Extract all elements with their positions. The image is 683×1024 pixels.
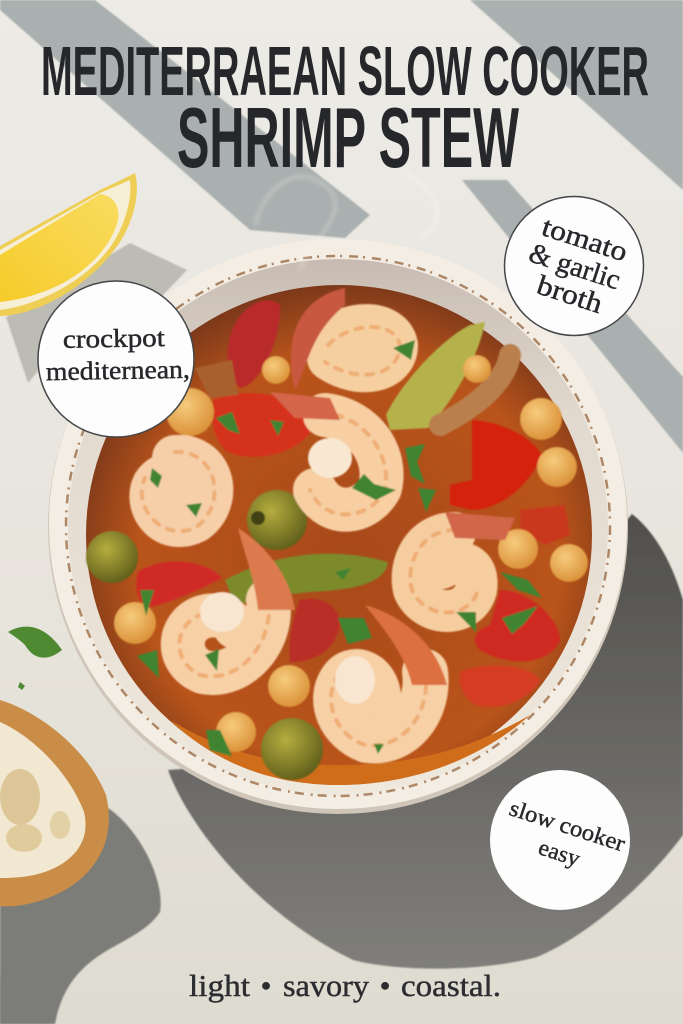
shadow: lemon bbox=[6, 243, 187, 383]
bell peppers and tomatoes bbox=[136, 300, 570, 707]
badge: crockpot mediterranean: crockpot bbox=[63, 323, 166, 354]
lemon wedge bbox=[0, 173, 137, 316]
tagline bbox=[189, 968, 501, 1003]
parsley garnish on counter bbox=[8, 627, 62, 690]
badge: slow cooker easy: easy bbox=[535, 834, 584, 871]
tagline: coastal. bbox=[401, 968, 501, 1003]
bowl bbox=[48, 239, 628, 814]
badge: slow cooker easy: slow cooker bbox=[506, 795, 629, 856]
onion strands bbox=[440, 355, 510, 425]
badge: tomato and garlic broth: & garlic bbox=[525, 238, 624, 296]
tagline: • bbox=[380, 968, 390, 1003]
tagline: light bbox=[189, 968, 250, 1003]
badge: tomato and garlic broth: broth bbox=[533, 270, 606, 320]
stew broth bbox=[86, 285, 592, 785]
tagline: • bbox=[261, 968, 271, 1003]
shadow: bread bbox=[0, 808, 161, 1024]
green peppers bbox=[225, 322, 485, 605]
olives bbox=[86, 490, 323, 780]
chickpeas bbox=[114, 355, 588, 752]
badge: crockpot mediterranean: mediternean, bbox=[46, 355, 190, 386]
badge: tomato and garlic broth: tomato bbox=[538, 212, 631, 268]
tagline: savory bbox=[283, 968, 370, 1003]
badge: slow cooker easy bbox=[490, 770, 630, 910]
bread slice bbox=[0, 700, 109, 906]
steam bbox=[255, 170, 437, 270]
title bbox=[41, 32, 649, 186]
badge: crockpot mediterranean bbox=[38, 281, 194, 437]
stew ingredients bbox=[86, 288, 588, 780]
shrimp bodies bbox=[142, 288, 515, 745]
shadow: bowl bbox=[168, 514, 683, 969]
parsley flakes bbox=[137, 340, 542, 756]
badge: tomato and garlic broth bbox=[504, 196, 644, 336]
